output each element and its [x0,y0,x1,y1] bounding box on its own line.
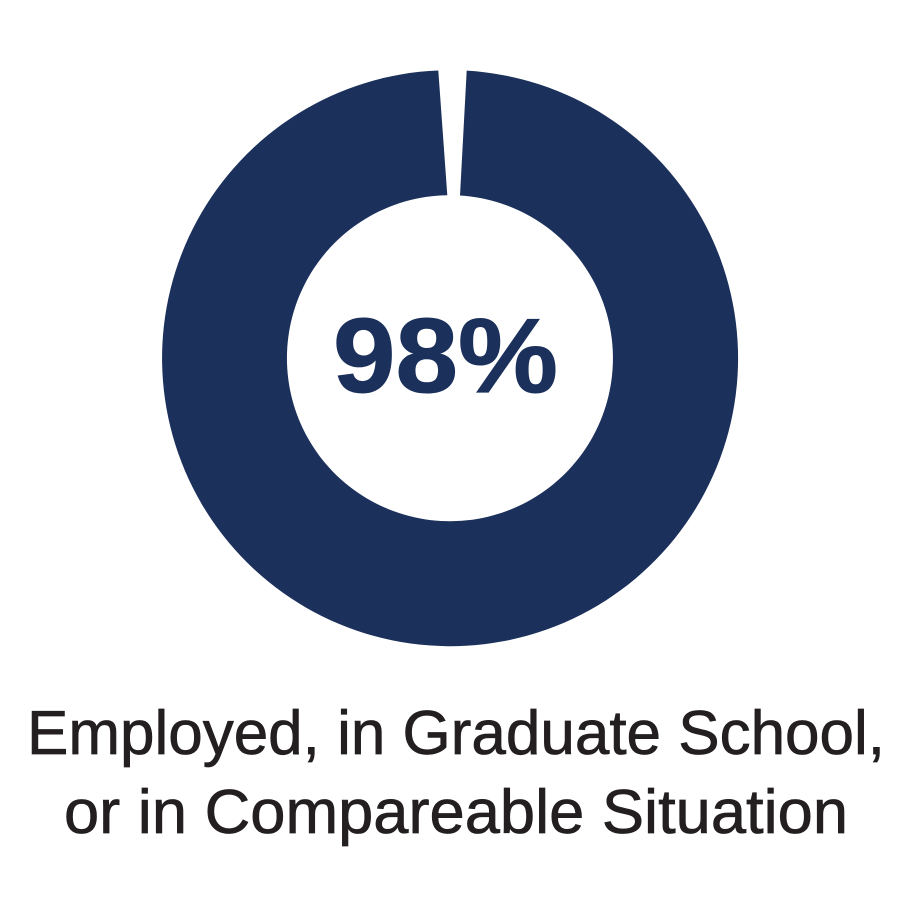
donut chart: 98% segment [162,70,738,646]
caption [27,699,885,847]
center value: 98%: 98% [333,297,558,415]
caption line 1: Employed, in Graduate School, [27,699,885,768]
caption line 2: or in Compareable Situation [64,778,848,847]
